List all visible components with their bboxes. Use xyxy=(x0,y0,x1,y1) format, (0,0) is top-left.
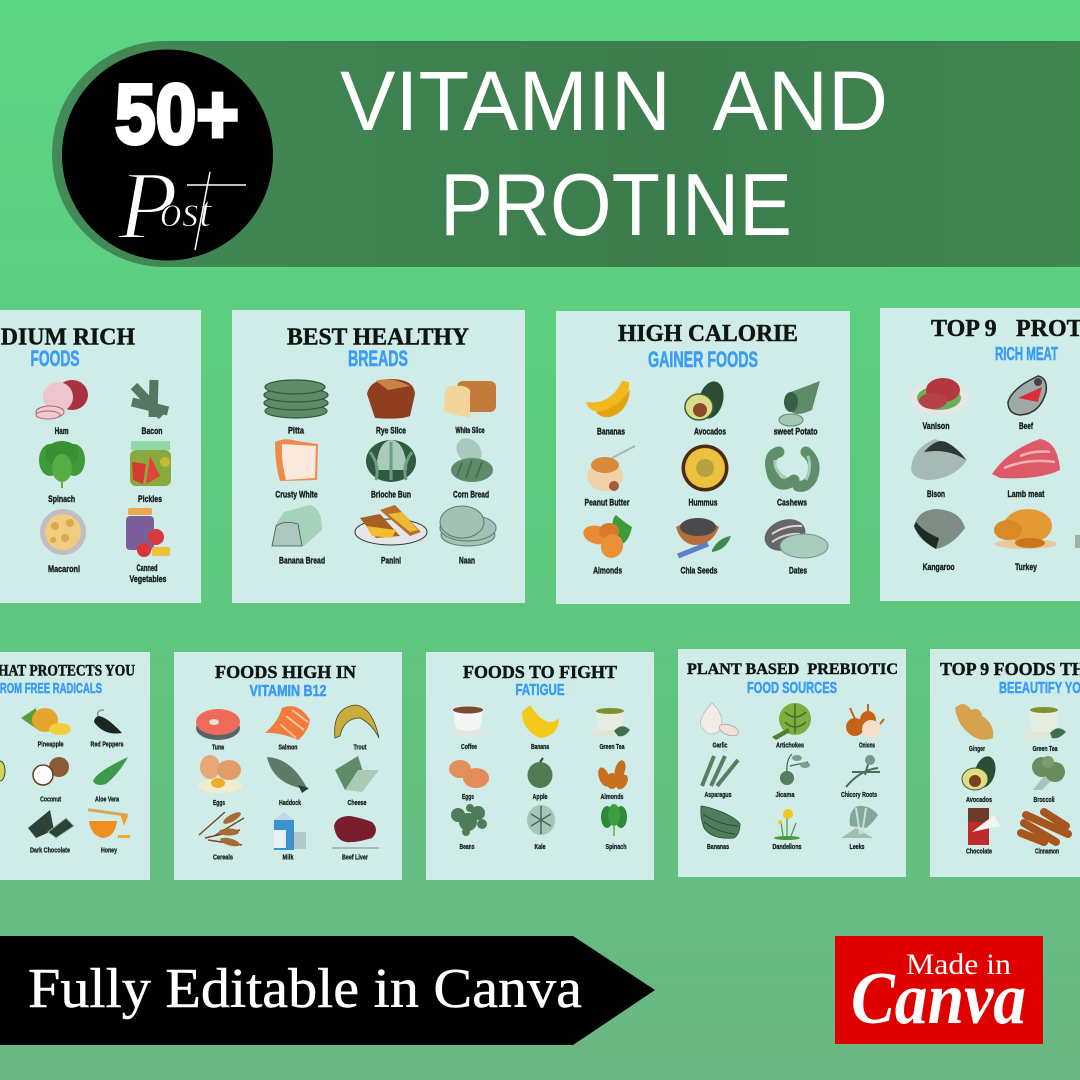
panel: top 9 protein rich meat xyxy=(880,308,1080,601)
food: panini xyxy=(355,505,427,566)
food: sweet potato: sweet Potato xyxy=(774,426,818,438)
heading: beautify you xyxy=(940,659,1080,697)
food: kale: Kale xyxy=(534,842,546,851)
food: canned vegetables: Canned xyxy=(136,563,158,574)
food: apple xyxy=(528,758,552,801)
heading: prebiotic food sources: PLANT BASED PREBIOTIC xyxy=(687,661,898,678)
food: apple: Apple xyxy=(532,792,548,801)
food: beans: Beans xyxy=(460,842,474,851)
food: ginger: Ginger xyxy=(969,744,985,753)
food: coconut: Coconut xyxy=(40,794,61,804)
food: tuna xyxy=(196,709,240,752)
food: garlic xyxy=(700,703,740,750)
food: dandelions xyxy=(772,809,802,851)
food: macaroni: Macaroni xyxy=(48,564,80,575)
food: pickles xyxy=(130,441,171,505)
heading: fatigue: FOODS TO FIGHT xyxy=(463,662,617,682)
food: cashews: Cashews xyxy=(777,498,807,508)
food: asparagus: Asparagus xyxy=(704,790,732,799)
food: beef xyxy=(1008,376,1046,432)
food: white slice: White Slice xyxy=(456,426,485,435)
food: cashews xyxy=(771,452,814,508)
panel: best healthy breads xyxy=(232,310,525,603)
food: turkey: Turkey xyxy=(1015,562,1038,573)
food: vanison: Vanison xyxy=(922,421,950,432)
title: VITAMIN AND xyxy=(340,54,888,148)
food: beans xyxy=(451,804,487,851)
food: beef liver xyxy=(332,816,379,862)
food: almonds xyxy=(581,515,632,576)
food: milk: Milk xyxy=(282,852,294,862)
food: chicory roots xyxy=(841,755,880,799)
food: avocado xyxy=(685,379,728,438)
badge: made in canva: Made in xyxy=(906,948,1011,981)
heading: fatigue: FATIGUE xyxy=(516,682,565,699)
food: pitta xyxy=(264,380,328,436)
panel: foods high in vitamin b12 xyxy=(174,652,402,880)
food: cheese: Cheese xyxy=(348,798,366,807)
food: almonds xyxy=(596,759,630,801)
panel: foods that protect from free radicals xyxy=(0,652,150,880)
food: red peppers: Red Peppers xyxy=(90,740,124,748)
title xyxy=(340,54,888,254)
food: kangaroo xyxy=(914,509,965,573)
food: red peppers xyxy=(90,710,124,748)
food: leeks: Leeks xyxy=(850,842,864,851)
food: pineapple: Pineapple xyxy=(38,740,64,748)
food: rye slice: Rye Slice xyxy=(376,426,406,436)
food: trout: Trout xyxy=(354,742,367,752)
heading: vitamin b12: VITAMIN B12 xyxy=(250,683,327,700)
food: asparagus xyxy=(702,756,738,799)
food: trout xyxy=(335,705,379,752)
food: chia seeds xyxy=(676,518,731,576)
food: peanut butter xyxy=(584,446,635,508)
heading: top 9 protein rich meat: TOP 9 xyxy=(931,316,997,342)
food: haddock: Haddock xyxy=(279,798,302,807)
food: chocolate xyxy=(966,808,1000,856)
food: dates: Dates xyxy=(789,566,807,576)
food: spinach xyxy=(601,804,627,851)
food: salmon xyxy=(265,706,310,752)
food: chia seeds: Chia Seeds xyxy=(680,566,718,576)
panel: foods to fight fatigue xyxy=(426,652,654,880)
food: beef liver: Beef Liver xyxy=(342,852,368,862)
food: dandelions: Dandelions xyxy=(772,842,802,851)
food: honey: Honey xyxy=(101,846,118,854)
food: dark chocolate: Dark Chocolate xyxy=(30,846,70,854)
food: jicama xyxy=(776,754,810,799)
panel: plant based prebiotic food sources xyxy=(678,649,906,877)
food: banana xyxy=(522,705,559,751)
food: cereals xyxy=(199,810,244,862)
food: garlic: Garlic xyxy=(712,740,728,750)
food: white slice xyxy=(444,381,496,435)
food: milk xyxy=(274,812,306,862)
food: lamb meat xyxy=(992,439,1060,500)
food: partly cut off item xyxy=(1075,535,1080,548)
heading: vitamin b12: FOODS HIGH IN xyxy=(215,662,356,682)
arrow banner: fully editable in canva xyxy=(0,936,655,1045)
heading: high calorie gainer foods: GAINER FOODS xyxy=(648,347,758,372)
food: hummus: Hummus xyxy=(688,498,718,508)
food: banana bread: Banana Bread xyxy=(279,556,325,566)
food: coffee xyxy=(449,706,487,751)
panel: high calorie gainer foods xyxy=(556,311,850,604)
food: ginger xyxy=(955,704,993,753)
heading: top 9 protein rich meat xyxy=(931,316,1080,364)
badge: 50+ Post: P xyxy=(118,152,178,260)
heading: best healthy breads: BEST HEALTHY xyxy=(287,324,469,350)
heading: free radicals xyxy=(0,662,135,697)
food: sweet potato xyxy=(774,381,820,438)
heading: best healthy breads xyxy=(287,324,469,371)
food: leeks xyxy=(841,806,878,851)
heading: high calorie gainer foods: HIGH CALORIE xyxy=(618,321,798,347)
food: brioche bun xyxy=(366,440,416,500)
food: haddock xyxy=(267,757,309,807)
food: aloe vera xyxy=(93,757,128,804)
food: banana bread xyxy=(272,505,325,566)
food: canned vegetables xyxy=(126,508,170,585)
food: eggs xyxy=(449,760,489,801)
food: rye slice xyxy=(367,379,415,436)
badge: 50+ Post: ost xyxy=(160,187,213,236)
food: beef: Beef xyxy=(1019,421,1034,432)
food: green tea xyxy=(1022,707,1066,753)
food: cinnamon xyxy=(1021,812,1068,856)
panel: sodium rich foods xyxy=(0,310,201,603)
food: broccoli xyxy=(1032,756,1065,804)
food: macaroni xyxy=(40,509,86,575)
food: artichokes xyxy=(772,703,811,750)
food: avocado, cut off xyxy=(0,761,5,781)
food: green tea: Green Tea xyxy=(600,742,625,751)
food: cheese xyxy=(335,756,379,807)
food: crusty white: Crusty White xyxy=(275,490,318,500)
food: broccoli: Broccoli xyxy=(1034,795,1054,804)
food: salmon: Salmon xyxy=(278,742,298,752)
food: cinnamon: Cinnamon xyxy=(1035,846,1059,856)
food: dates xyxy=(760,514,828,576)
heading: vitamin b12 xyxy=(215,662,356,700)
food: hummus xyxy=(682,444,728,508)
food: chocolate: Chocolate xyxy=(966,846,992,856)
food: spinach xyxy=(39,441,85,505)
food: vanison xyxy=(910,378,968,432)
food: pineapple xyxy=(21,708,71,748)
title: PROTINE xyxy=(440,155,792,254)
food: bacon xyxy=(132,380,168,437)
food: corn bread: Corn Bread xyxy=(453,490,489,500)
food: chicory roots: Chicory Roots xyxy=(841,790,877,799)
heading: prebiotic food sources: FOOD SOURCES xyxy=(747,680,837,697)
food: eggs xyxy=(198,755,242,807)
food: panini: Panini xyxy=(381,556,401,566)
food: ham: Ham xyxy=(55,426,69,437)
heading: fatigue xyxy=(463,662,617,699)
food: coffee: Coffee xyxy=(461,742,477,751)
food: naan: Naan xyxy=(459,556,475,566)
food: pickles: Pickles xyxy=(138,494,162,505)
food: brioche bun: Brioche Bun xyxy=(371,490,411,500)
badge: 50+ Post: 50+ xyxy=(115,67,239,161)
food: kangaroo: Kangaroo xyxy=(923,562,955,573)
food: pitta: Pitta xyxy=(288,426,305,436)
food: dark chocolate xyxy=(28,810,74,854)
arrow banner: fully editable in canva: Fully Editable in Canva xyxy=(28,958,582,1020)
food: naan xyxy=(440,506,496,566)
food: banana: Banana xyxy=(531,742,550,751)
food: artichokes: Artichokes xyxy=(776,740,804,750)
food: green tea: Green Tea xyxy=(1032,744,1058,753)
food: crusty white xyxy=(275,439,318,500)
food: aloe vera: Aloe Vera xyxy=(95,794,120,804)
heading: sodium rich foods: FOODS xyxy=(30,346,80,371)
food: cereals: Cereals xyxy=(213,852,233,862)
food: bison xyxy=(911,439,967,500)
food: tuna: Tuna xyxy=(212,742,225,752)
food: almonds: Almonds xyxy=(593,566,622,576)
food: bananas: Bananas xyxy=(597,426,625,438)
food: ham xyxy=(36,380,88,437)
food: kale xyxy=(527,805,555,851)
badge: made in canva: Canva xyxy=(851,958,1026,1040)
food: corn bread xyxy=(451,433,493,500)
heading: best healthy breads: BREADS xyxy=(348,346,408,371)
badge: made in canva xyxy=(835,936,1043,1044)
food: bananas xyxy=(586,381,630,438)
food: bacon: Bacon xyxy=(142,426,163,437)
badge: 50+ Post xyxy=(62,50,273,260)
food: canned vegetables: Vegetables xyxy=(130,574,166,585)
food: green tea xyxy=(591,708,630,751)
food: turkey xyxy=(994,509,1057,573)
panel: top 9 foods that beautify you xyxy=(930,649,1080,877)
food: lamb meat: Lamb meat xyxy=(1008,489,1045,500)
food: avocados xyxy=(962,754,999,804)
food: bison: Bison xyxy=(927,489,945,500)
heading: sodium rich foods xyxy=(0,324,135,371)
food: onions xyxy=(846,704,884,750)
food: onions: Onions xyxy=(859,740,875,750)
food: spinach: Spinach xyxy=(606,842,627,851)
food: avocado: Avocados xyxy=(694,426,726,438)
food: bananas: Bananas xyxy=(707,842,729,851)
food: spinach: Spinach xyxy=(48,494,75,505)
food: honey xyxy=(88,808,130,854)
food: almonds: Almonds xyxy=(600,792,624,801)
food: jicama: Jicama xyxy=(776,790,795,799)
food: peanut butter: Peanut Butter xyxy=(584,498,630,508)
food: avocados: Avocados xyxy=(966,795,992,804)
heading: prebiotic food sources xyxy=(687,661,898,697)
food: eggs: Eggs xyxy=(462,792,474,801)
heading: high calorie gainer foods xyxy=(618,321,798,372)
food: eggs: Eggs xyxy=(213,798,225,807)
banner: title and post count xyxy=(52,41,1080,267)
food: bananas xyxy=(701,806,740,851)
food: coconut xyxy=(33,757,69,804)
